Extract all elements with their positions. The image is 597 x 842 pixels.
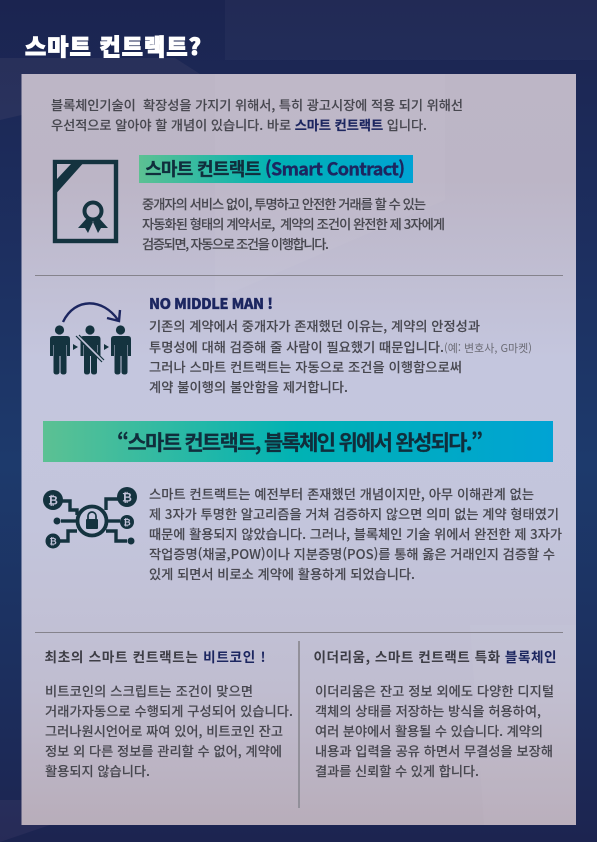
no middle man text: 그러나 스마트 컨트랙트는 자동으로 조건을 이행함으로써 xyxy=(149,357,462,376)
explanation paragraph xyxy=(149,484,562,583)
icon: certificate xyxy=(53,160,116,241)
title: 스마트 컨트랙트? xyxy=(25,28,201,62)
column: ethereum: 결과를 신뢰할 수 있게 합니다. xyxy=(315,761,479,780)
smart contract description xyxy=(142,194,445,253)
explanation paragraph: 제 3자가 투명한 알고리즘을 거쳐 검증하지 않으면 의미 없는 계약 형태였기 xyxy=(149,504,559,523)
column: bitcoin: 거래가자동으로 수행되게 구성되어 있습니다. xyxy=(45,701,293,720)
intro text xyxy=(51,95,463,134)
column: ethereum: 이더리움, 스마트 컨트랙트 특화 블록체인 xyxy=(314,646,556,666)
explanation paragraph: 때문에 활용되지 않았습니다. 그러나, 블록체인 기술 위에서 완전한 제 3자가 xyxy=(149,524,562,543)
column: bitcoin: 활용되지 않습니다. xyxy=(45,761,150,780)
column: bitcoin: 최초의 스마트 컨트랙트는 비트코인 ! xyxy=(44,646,266,666)
no middle man text: 기존의 계약에서 중개자가 존재했던 이유는, 계약의 안정성과 xyxy=(149,316,480,335)
no middle man text: NO MIDDLE MAN ! xyxy=(149,293,273,314)
no middle man text: (예: 변호사, G마켓) xyxy=(444,340,532,356)
no middle man text: 계약 불이행의 불안함을 제거합니다. xyxy=(149,377,348,396)
icon: bitcoin network lock: ₿ xyxy=(49,534,57,548)
smart contract description: 자동화된 형태의 계약서로, 계약의 조건이 완전한 제 3자에게 xyxy=(142,214,445,233)
intro text: 우선적으로 알아야 할 개념이 있습니다. 바로 스마트 컨트랙트 입니다. xyxy=(51,115,427,134)
heading: smart contract: 스마트 컨트랙트 (Smart Contract) xyxy=(145,156,405,182)
icon: bitcoin network lock: ₿ xyxy=(123,516,131,528)
explanation paragraph: 작업증명(채굴,POW)이나 지분증명(POS)를 통해 옳은 거래인지 검증할 수 xyxy=(149,544,555,563)
explanation paragraph: 스마트 컨트랙트는 예전부터 존재했던 개념이지만, 아무 이해관계 없는 xyxy=(149,484,534,503)
smart contract description: 검증되면, 자동으로 조건을 이행합니다. xyxy=(142,234,329,253)
banner quote xyxy=(43,421,553,462)
column: bitcoin: 비트코인의 스크립트는 조건이 맞으면 xyxy=(45,681,253,700)
no middle man text: 투명성에 대해 검증해 줄 사람이 필요했기 때문입니다. xyxy=(149,337,444,356)
icon: bitcoin network lock: ₿ xyxy=(122,488,132,506)
column: bitcoin: 정보 외 다른 정보를 관리할 수 없어, 계약에 xyxy=(45,741,282,760)
column: ethereum: 여러 분야에서 활용될 수 있습니다. 계약의 xyxy=(315,721,543,740)
column: ethereum: 내용과 입력을 공유 하면서 무결성을 보장해 xyxy=(315,741,553,760)
icon: no middle man xyxy=(50,303,131,374)
smart contract description: 중개자의 서비스 없이, 투명하고 안전한 거래를 할 수 있는 xyxy=(142,194,426,213)
explanation paragraph: 있게 되면서 비로소 계약에 활용하게 되었습니다. xyxy=(149,564,415,583)
icon: bitcoin network lock: ₿ xyxy=(48,492,58,508)
no middle man text xyxy=(149,293,532,396)
icon: bitcoin network lock xyxy=(43,487,137,548)
column: ethereum: 객체의 상태를 저장하는 방식을 허용하여, xyxy=(315,701,541,720)
intro text: 블록체인기술이 확장성을 가지기 위해서, 특히 광고시장에 적용 되기 위해선 xyxy=(51,95,463,114)
banner quote: “스마트 컨트랙트, 블록체인 위에서 완성되다.” xyxy=(117,427,483,457)
column: bitcoin: 그러나원시언어로 짜여 있어, 비트코인 잔고 xyxy=(45,721,283,740)
column: ethereum: 이더리움은 잔고 정보 외에도 다양한 디지털 xyxy=(315,681,554,700)
column: ethereum xyxy=(314,646,556,780)
column: bitcoin xyxy=(44,646,293,780)
